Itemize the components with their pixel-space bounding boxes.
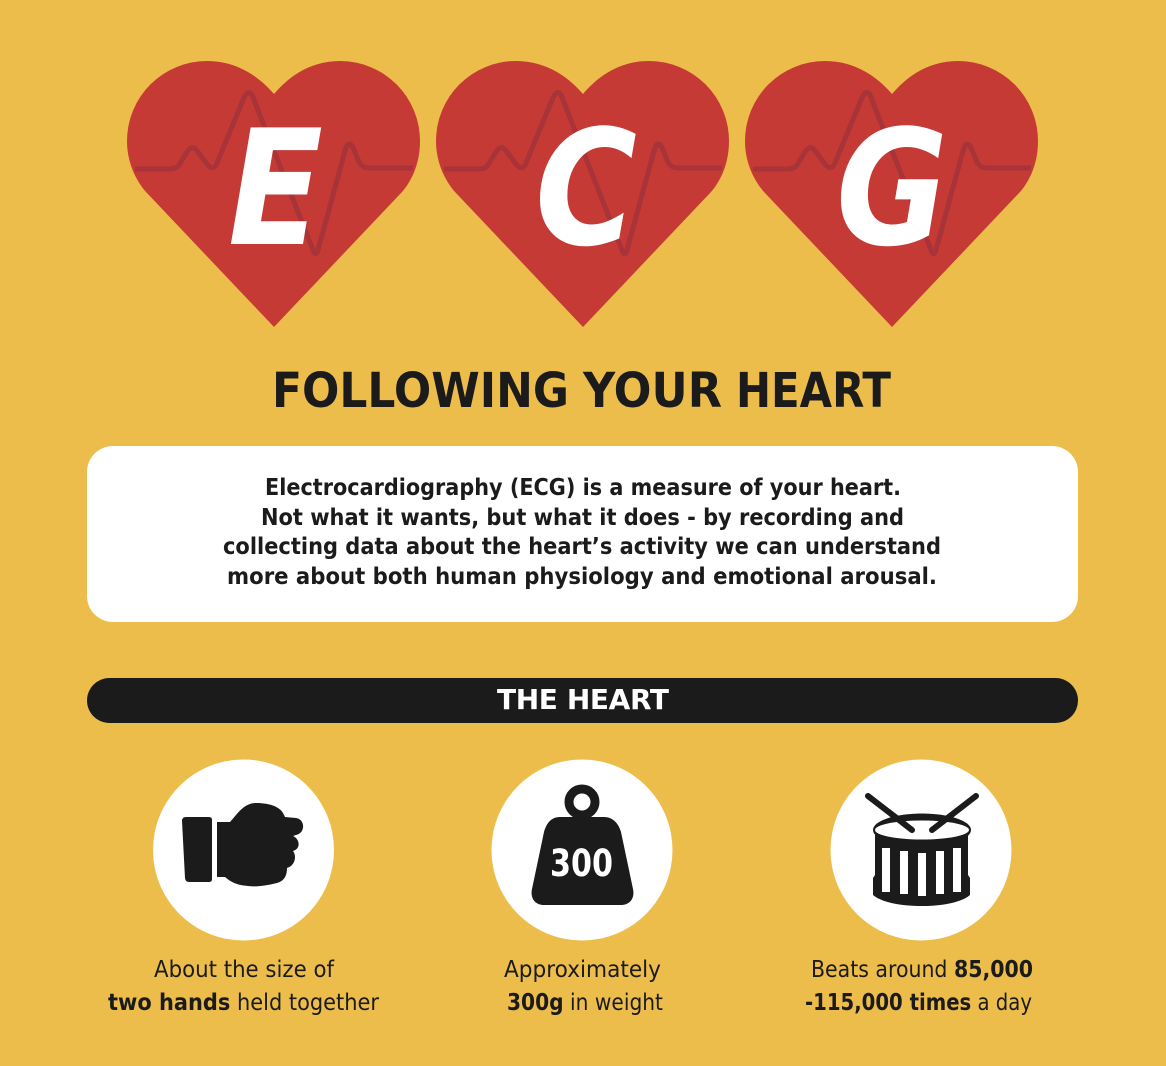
title: YOUR	[582, 363, 722, 419]
section banner: the heart	[87, 678, 1078, 723]
icon: fist	[153, 760, 334, 940]
caption: beats: -115,000 times a day	[805, 988, 1032, 1016]
caption: weight	[504, 955, 663, 1016]
intro text: Electrocardiography (ECG) is a measure of your heart.	[265, 473, 901, 501]
title: HEART	[736, 363, 891, 419]
intro text: collecting data about the heart’s activity we can understand	[223, 532, 941, 560]
caption: beats	[805, 955, 1033, 1016]
caption: size: two hands held together	[108, 988, 379, 1016]
section banner: the heart: THE HEART	[497, 683, 669, 716]
heart with letter C: C	[535, 95, 637, 282]
icon: drum	[830, 760, 1012, 940]
icon: 300g weight: 300	[550, 842, 613, 885]
heart with letter G	[745, 61, 1038, 327]
intro text	[223, 473, 941, 590]
panel: introduction	[87, 446, 1078, 622]
title: FOLLOWING	[272, 363, 569, 419]
heart with letter C	[436, 61, 729, 327]
title	[272, 363, 891, 419]
caption: size	[108, 955, 379, 1016]
intro text: Not what it wants, but what it does - by recording and	[261, 503, 904, 531]
caption: weight: 300g in weight	[507, 988, 663, 1016]
heart with letter G: G	[836, 95, 948, 282]
caption: beats: Beats around 85,000	[811, 955, 1033, 983]
caption: size: About the size of	[154, 955, 335, 983]
icon: 300g weight	[492, 760, 672, 940]
caption: weight: Approximately	[504, 955, 661, 983]
heart with letter E	[127, 61, 420, 327]
heart with letter E: E	[228, 95, 323, 282]
intro text: more about both human physiology and emotional arousal.	[227, 562, 937, 590]
